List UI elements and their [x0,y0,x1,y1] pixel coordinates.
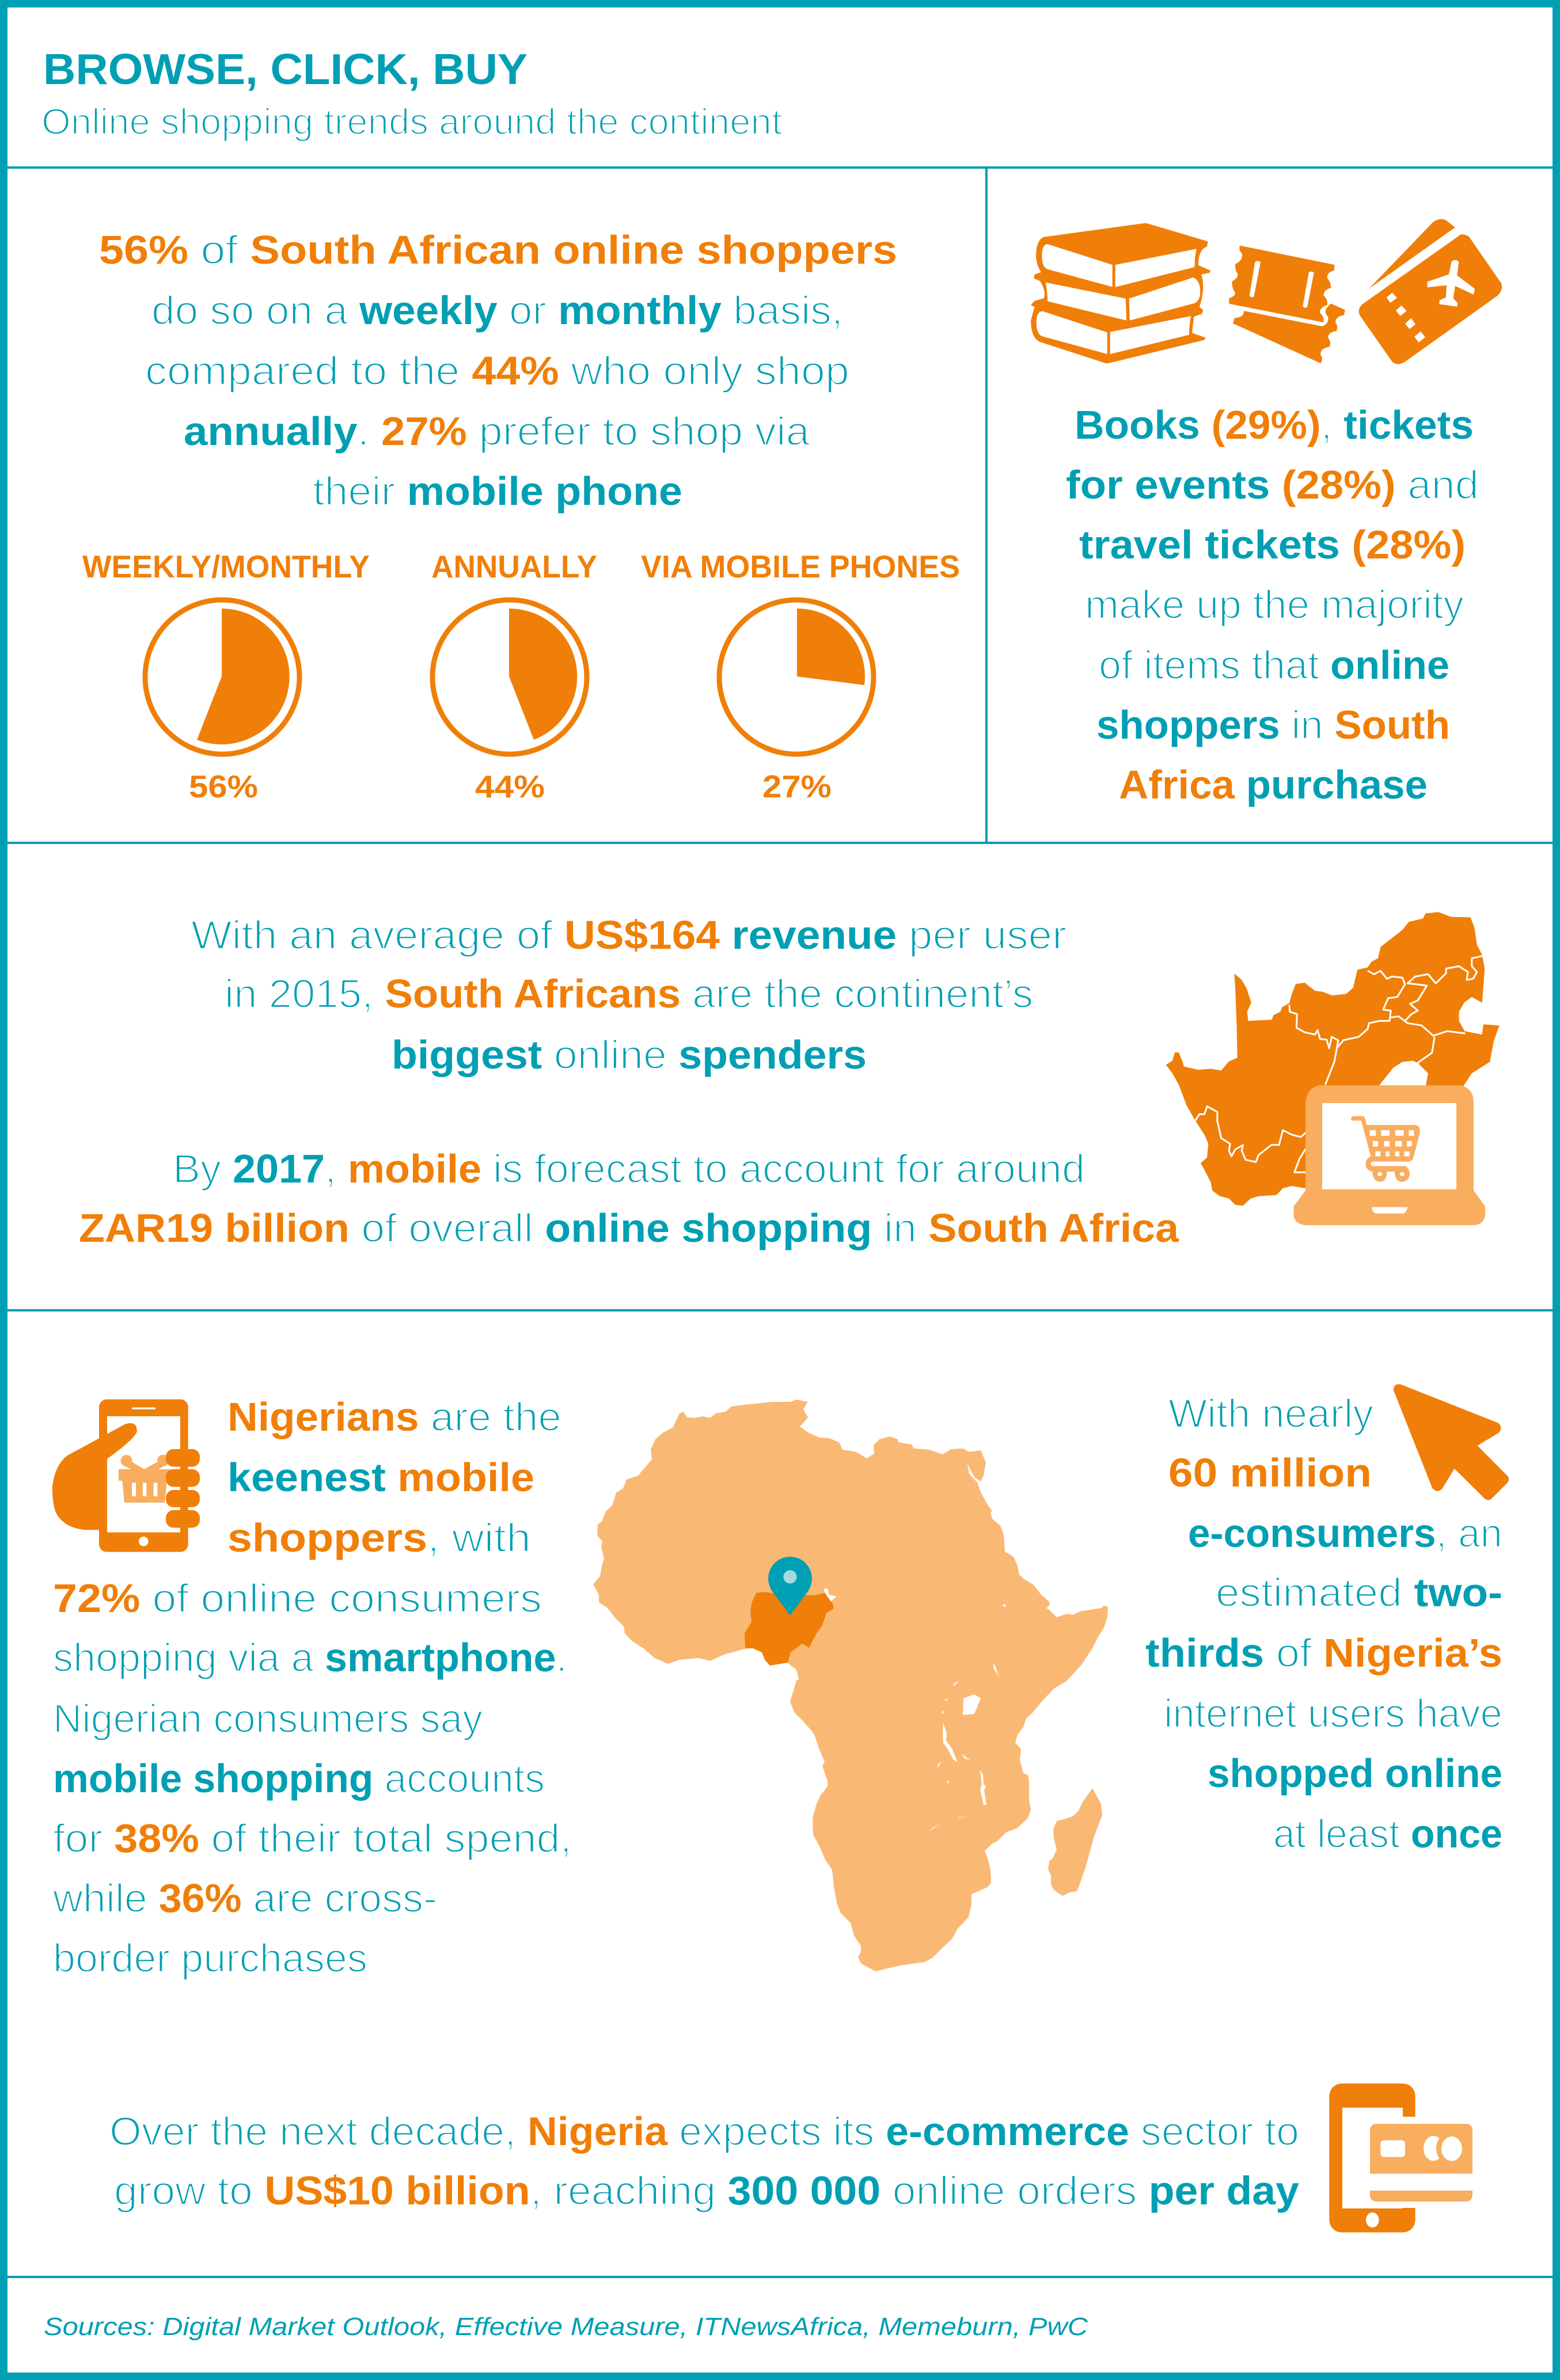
pie chart: weekly/monthly 56% [82,549,370,804]
pie chart: via mobile phones 27%: 27% [762,769,832,804]
pie chart: via mobile phones 27% [641,549,960,804]
text block: keenest mobile shoppers: shoppers , with [227,1515,531,1560]
text block: revenue per user [191,913,1066,1077]
panel: Nigeria [52,1384,1509,2233]
text block: shopping frequency: their mobile phone [313,469,682,514]
text block: e-commerce forecast: Over the next decade, Nigeria expects its e-commerce sector to [109,2109,1299,2154]
text block: e-consumers: shopped online [1208,1751,1502,1796]
map: Africa with Nigeria highlighted [593,1400,1108,1971]
text block: items purchased: Africa purchase [1119,762,1428,807]
text block: keenest mobile shoppers: 72% of online consumers [53,1576,542,1621]
pie chart: weekly/monthly 56%: WEEKLY/MONTHLY [82,549,370,584]
pie chart: annually 44%: ANNUALLY [431,549,597,584]
text block: keenest mobile shoppers: for 38% of their total spend, [53,1816,572,1861]
text block: shopping frequency: annually . 27% prefer to shop via [184,409,810,454]
panel: South African spending [79,912,1500,1250]
text block: shopping frequency: compared to the 44% who only shop [145,348,849,393]
pie chart: weekly/monthly 56%: 56% [189,769,258,804]
text block: revenue per user: With an average of US$164 revenue per user [191,913,1066,957]
panel: items purchased [1031,219,1502,807]
text block: mobile forecast [79,1146,1179,1250]
text block: e-consumers: With nearly [1168,1391,1373,1436]
pie chart: annually 44% [431,549,597,804]
map: South Africa [1166,912,1500,1206]
text block: revenue per user: in 2015, South Africans are the continent’s [225,971,1033,1016]
text block: items purchased: Books (29%), tickets [1075,402,1474,447]
subtitle: Online shopping trends around the continent [41,102,783,142]
panel: South African shopping frequency [82,227,960,804]
icon: stack of books [1031,223,1210,364]
icon: phone with credit card [1329,2084,1472,2233]
icon: cursor arrow [1394,1384,1509,1500]
text block: items purchased: make up the majority [1085,582,1464,627]
text block: items purchased: for events (28%) and [1066,462,1479,507]
icon: laptop with shopping cart [1294,1085,1485,1225]
text block: items purchased: of items that online [1099,642,1449,687]
text block: items purchased [1066,402,1479,807]
icon: travel ticket with plane [1359,219,1502,364]
text block: e-consumers: internet users have [1164,1691,1502,1736]
text block: keenest mobile shoppers: while 36% are cross- [52,1876,437,1921]
text block: keenest mobile shoppers: shopping via a smartphone. [53,1635,567,1680]
pie chart: annually 44%: 44% [475,769,545,804]
text block: shopping frequency: 56% of South African online shoppers [99,227,897,272]
text block: mobile forecast: ZAR19 billion of overall online shopping in South Africa [79,1206,1179,1250]
text block: e-consumers: estimated two- [1216,1570,1502,1615]
text block: e-consumers: 60 million [1168,1450,1372,1495]
text block: shopping frequency: do so on a weekly or monthly basis, [151,288,843,333]
text block: items purchased: shoppers in South [1096,702,1450,747]
sources: Sources: Digital Market Outlook, Effective Measure, ITNewsAfrica, Memeburn, PwC [44,2313,1088,2341]
text block: shopping frequency [99,227,897,514]
text block: revenue per user: biggest online spenders [392,1032,867,1077]
title [41,45,783,142]
text block: mobile forecast: By 2017, mobile is forecast to account for around [173,1146,1085,1191]
text block: e-consumers: thirds of Nigeria’s [1145,1630,1502,1675]
text block: keenest mobile shoppers: keenest mobile [227,1455,534,1500]
title: BROWSE, CLICK, BUY [43,45,527,93]
text block: items purchased: travel tickets (28%) [1079,522,1466,567]
text block: e-consumers: at least once [1273,1811,1502,1856]
text block: keenest mobile shoppers: Nigerians are the [227,1394,561,1439]
icon: event ticket [1229,246,1345,363]
text block: keenest mobile shoppers [52,1394,572,1980]
icon: location pin [768,1557,812,1615]
text block: e-consumers: e-consumers, an [1188,1511,1502,1556]
text block: keenest mobile shoppers: mobile shopping accounts [53,1756,545,1801]
text block: e-consumers [1145,1391,1502,1856]
pie chart: via mobile phones 27%: VIA MOBILE PHONES [641,549,960,584]
icon: hand holding phone with basket [52,1400,200,1552]
text block: e-commerce forecast [109,2109,1299,2213]
text block: e-commerce forecast: grow to US$10 billion , reaching 300 000 online orders per day [114,2168,1299,2213]
text block: keenest mobile shoppers: border purchases [53,1936,367,1980]
text block: keenest mobile shoppers: Nigerian consumers say [53,1696,483,1741]
